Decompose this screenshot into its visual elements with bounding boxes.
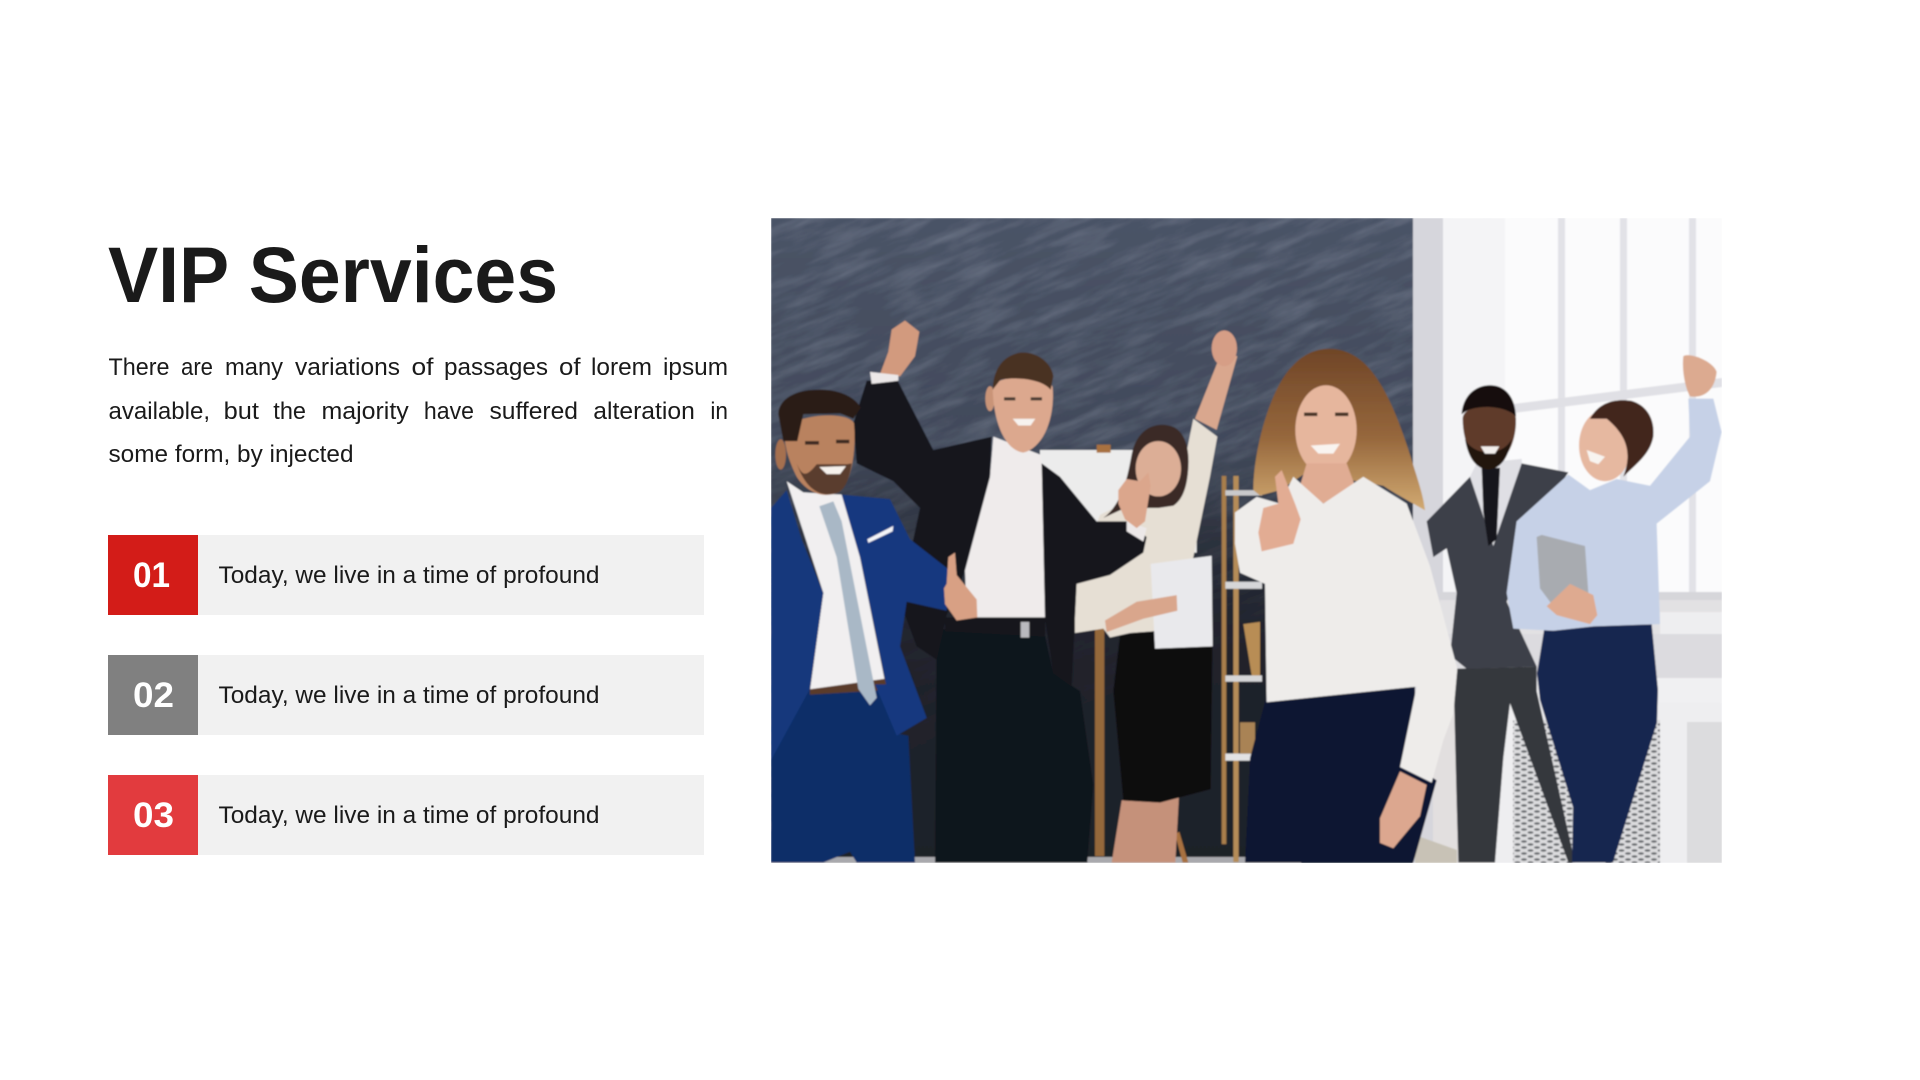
intro paragraph: many (225, 354, 283, 381)
intro paragraph: but (224, 398, 259, 425)
team photo illustration (771, 218, 1722, 863)
intro paragraph: variations (295, 354, 400, 381)
man in black suit (853, 321, 1151, 863)
right-side people, drawn in crop coordinates (1235, 349, 1722, 863)
intro paragraph: the (273, 398, 306, 425)
intro paragraph: alteration (593, 398, 695, 425)
list item 01: 01 (133, 556, 170, 595)
intro paragraph: in (710, 398, 728, 425)
man in grey suit (1427, 385, 1575, 863)
whiteboard and easel (1038, 444, 1198, 863)
left-side people, drawn in crop coordinates (771, 321, 1262, 863)
woman with tablet (1507, 355, 1722, 863)
slide canvas (108, 218, 1722, 863)
list item 02 (108, 655, 704, 735)
intro paragraph: ipsum (663, 354, 728, 381)
list item 01 (108, 535, 704, 615)
intro paragraph: suffered (490, 398, 578, 425)
intro paragraph: majority (322, 398, 409, 425)
intro paragraph: passages (444, 354, 548, 381)
intro paragraph: some form, by injected (108, 441, 354, 468)
bookshelf (1222, 476, 1262, 862)
list item 03 (108, 775, 704, 855)
man in blue suit (771, 390, 977, 863)
intro paragraph (108, 354, 728, 468)
intro paragraph: lorem (591, 354, 652, 381)
list item 03: 03 (133, 796, 174, 835)
list item 01: Today, we live in a time of profound (218, 562, 600, 589)
list item 03: Today, we live in a time of profound (218, 802, 600, 829)
intro paragraph: available, (108, 398, 210, 425)
intro paragraph: are (181, 354, 213, 381)
intro paragraph: There (108, 354, 170, 381)
room background (771, 218, 1722, 863)
woman in white shirt (1235, 349, 1457, 863)
list item 02: 02 (133, 676, 174, 715)
intro paragraph: have (424, 398, 474, 425)
woman with paper (1075, 330, 1237, 863)
title: VIP Services (108, 230, 558, 319)
intro paragraph: of (412, 354, 434, 381)
intro paragraph: of (559, 354, 581, 381)
list item 02: Today, we live in a time of profound (218, 682, 600, 709)
